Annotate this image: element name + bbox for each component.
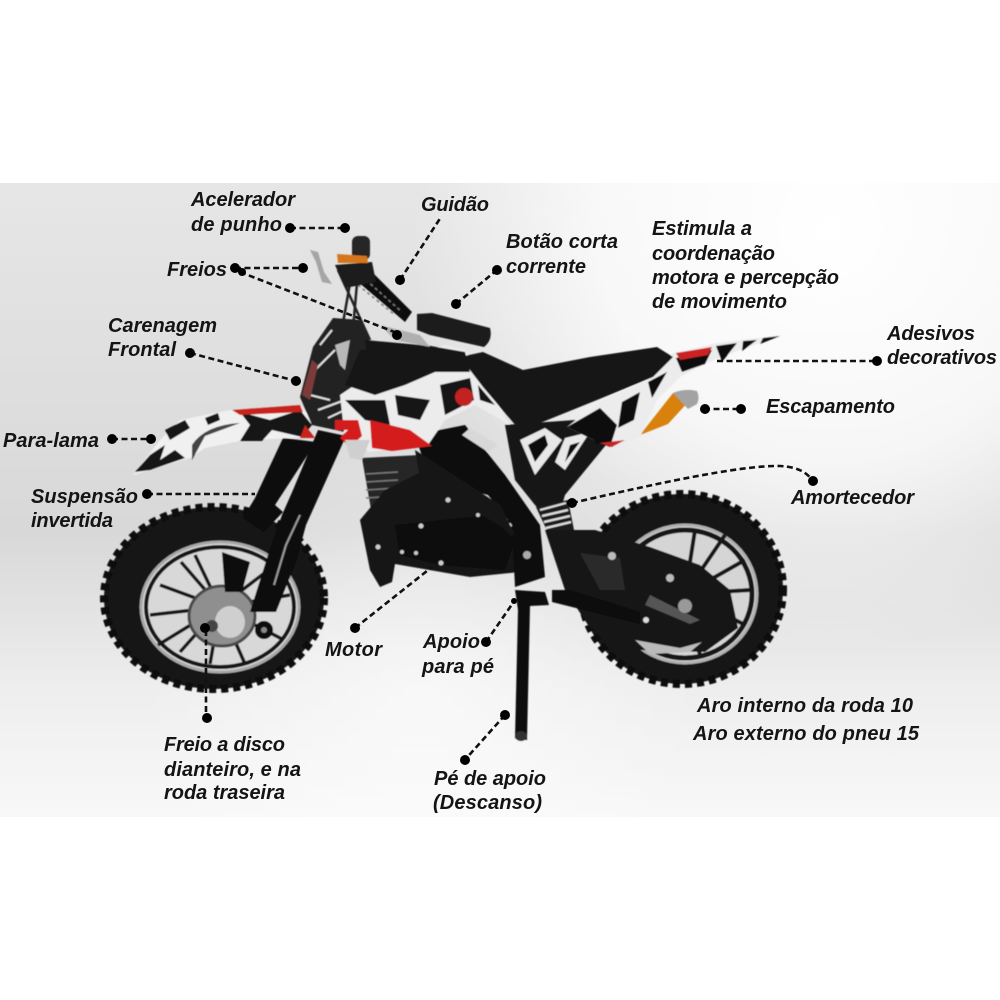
label: adesivos decorativos: decorativos <box>887 347 997 369</box>
label: botao corta corrente: corrente <box>506 256 586 278</box>
text block: aro interno e externo: Aro externo do pneu 15 <box>692 723 920 745</box>
text block: estimula a coordenacao: coordenação <box>652 243 775 265</box>
text block: estimula a coordenacao: Estimula a <box>652 218 752 240</box>
label: carenagem frontal: Carenagem <box>108 315 217 337</box>
callout: guidao <box>395 217 441 285</box>
swingarm and chain guard <box>545 530 738 654</box>
text block: aro interno e externo: Aro interno da roda 10 <box>696 695 913 717</box>
label: acelerador de punho: Acelerador <box>190 189 296 211</box>
engine <box>360 455 520 587</box>
handlebar <box>310 236 491 375</box>
front wheel <box>104 507 324 689</box>
label: apoio para pe: Apoio <box>422 631 480 653</box>
callout: amortecedor <box>567 466 818 508</box>
label: carenagem frontal: Frontal <box>108 339 176 361</box>
label: escapamento: Escapamento <box>766 396 895 418</box>
label: pe de apoio: (Descanso) <box>433 792 542 814</box>
exhaust <box>640 390 698 435</box>
label: guidao: Guidão <box>421 194 489 216</box>
main frame <box>415 425 545 587</box>
shock spring <box>536 500 574 537</box>
label: botao corta corrente: Botão corta <box>506 231 618 253</box>
callout: botao <box>451 265 502 309</box>
label: freio a disco: roda traseira <box>164 782 285 804</box>
front fork <box>222 430 346 612</box>
label: freios: Freios <box>167 259 227 281</box>
callout: adesivos <box>717 356 882 366</box>
label: suspensao invertida: Suspensão <box>31 486 138 508</box>
kickstand <box>515 590 549 741</box>
front cowl <box>300 318 372 432</box>
label: apoio para pe: para pé <box>421 656 494 678</box>
label: motor: Motor <box>325 639 383 661</box>
rear fender <box>567 335 783 447</box>
callout: carenagem <box>185 348 301 386</box>
callout: freio a disco <box>200 623 212 723</box>
label: freio a disco: dianteiro, e na <box>164 759 301 781</box>
label: amortecedor: Amortecedor <box>790 487 915 509</box>
label: para-lama: Para-lama <box>3 430 99 452</box>
photo background panel <box>0 183 1000 817</box>
text block: estimula a coordenacao: de movimento <box>652 291 787 313</box>
callout: suspensao <box>142 489 255 499</box>
callout: para-lama <box>107 434 156 444</box>
label: suspensao invertida: invertida <box>31 510 113 532</box>
callout: pe de apoio <box>460 710 510 765</box>
callout: apoio <box>481 598 517 647</box>
callout: motor <box>350 567 432 633</box>
front fender <box>133 405 315 475</box>
label: acelerador de punho: de punho <box>191 214 282 236</box>
text block: estimula a coordenacao: motora e percepção <box>652 267 839 289</box>
label: pe de apoio: Pé de apoio <box>434 768 546 790</box>
callout lines and dots <box>107 217 882 765</box>
label: freio a disco: Freio a disco <box>164 734 285 756</box>
rear wheel <box>581 494 783 684</box>
seat <box>460 347 673 427</box>
motorcycle illustration <box>104 236 783 741</box>
callout: freios <box>230 263 402 340</box>
label: adesivos decorativos: Adesivos <box>886 323 975 345</box>
callout: escapamento <box>700 404 746 414</box>
callout: acelerador <box>285 223 350 233</box>
rear subframe <box>505 420 610 528</box>
fuel tank shroud <box>335 345 510 460</box>
